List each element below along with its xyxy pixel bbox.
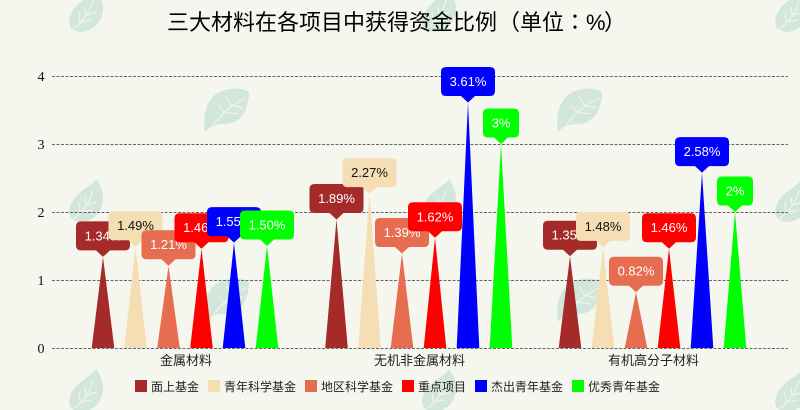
callouts: 优秀青年基金: 1.50%: [249, 218, 286, 232]
y axis labels: 0: [38, 342, 44, 357]
callouts: 杰出青年基金: 1.55%: [216, 214, 253, 229]
legend: 重点项目: [418, 380, 466, 394]
y axis labels: 3: [38, 138, 44, 153]
x axis category labels: 无机非金属材料: [374, 353, 465, 368]
legend: 青年科学基金: [224, 379, 296, 394]
callouts: 重点项目: [174, 202, 696, 249]
callouts: 地区科学基金: [142, 218, 663, 292]
title: ：: [564, 5, 586, 37]
callouts: 地区科学基金: 1.21%: [150, 237, 187, 252]
group: 金属材料 bars: [92, 243, 278, 348]
y axis labels: 2: [38, 206, 44, 221]
x axis category labels: [160, 353, 699, 368]
legend: 优秀青年基金: [588, 379, 660, 394]
callouts: 面上基金: 1.35%: [552, 228, 589, 243]
callouts: 面上基金: 1.89%: [318, 191, 355, 206]
legend: 杰出青年基金: [491, 379, 563, 394]
callouts: 杰出青年基金: 3.61%: [450, 74, 487, 89]
callouts: 青年科学基金: 1.49%: [117, 218, 154, 233]
callouts: 地区科学基金: 1.39%: [384, 225, 421, 240]
callouts: 优秀青年基金: [240, 108, 753, 246]
title: 三大材料在各项目中获得资金比例: [167, 10, 497, 35]
callouts: 面上基金: 1.34%: [85, 228, 122, 243]
x axis category labels: 金属材料: [160, 353, 212, 368]
callouts: 青年科学基金: [108, 158, 630, 247]
title: ）: [604, 5, 626, 37]
callouts: 青年科学基金: 1.48%: [585, 219, 622, 234]
y axis labels: 1: [38, 274, 44, 289]
callouts: 青年科学基金: 2.27%: [351, 165, 388, 180]
legend: [135, 379, 660, 394]
callouts: 地区科学基金: 0.82%: [618, 264, 655, 279]
callouts: 重点项目: 1.46%: [183, 220, 220, 235]
legend: 地区科学基金: [321, 379, 393, 394]
group: 有机高分子材料 bars: [559, 173, 746, 348]
bar chart: triangular bars: [92, 102, 746, 348]
title: 单位: [520, 10, 564, 35]
group: 无机非金属材料 bars: [325, 102, 512, 348]
callouts: 优秀青年基金: 2%: [726, 184, 745, 198]
y axis labels: [38, 70, 44, 357]
callouts: 杰出青年基金: 2.58%: [684, 144, 721, 159]
callouts: 重点项目: 1.46%: [651, 220, 688, 235]
y axis labels: 4: [38, 70, 44, 85]
title: （: [498, 5, 520, 37]
callouts: 面上基金: [76, 184, 597, 257]
title: [167, 5, 626, 37]
callouts: 优秀青年基金: 3%: [492, 116, 511, 130]
title: %: [586, 10, 606, 35]
callouts: 杰出青年基金: [207, 67, 729, 243]
x axis category labels: 有机高分子材料: [608, 353, 699, 368]
callouts: 重点项目: 1.62%: [417, 209, 454, 224]
legend: 面上基金: [151, 379, 199, 394]
value callouts: [76, 67, 753, 292]
